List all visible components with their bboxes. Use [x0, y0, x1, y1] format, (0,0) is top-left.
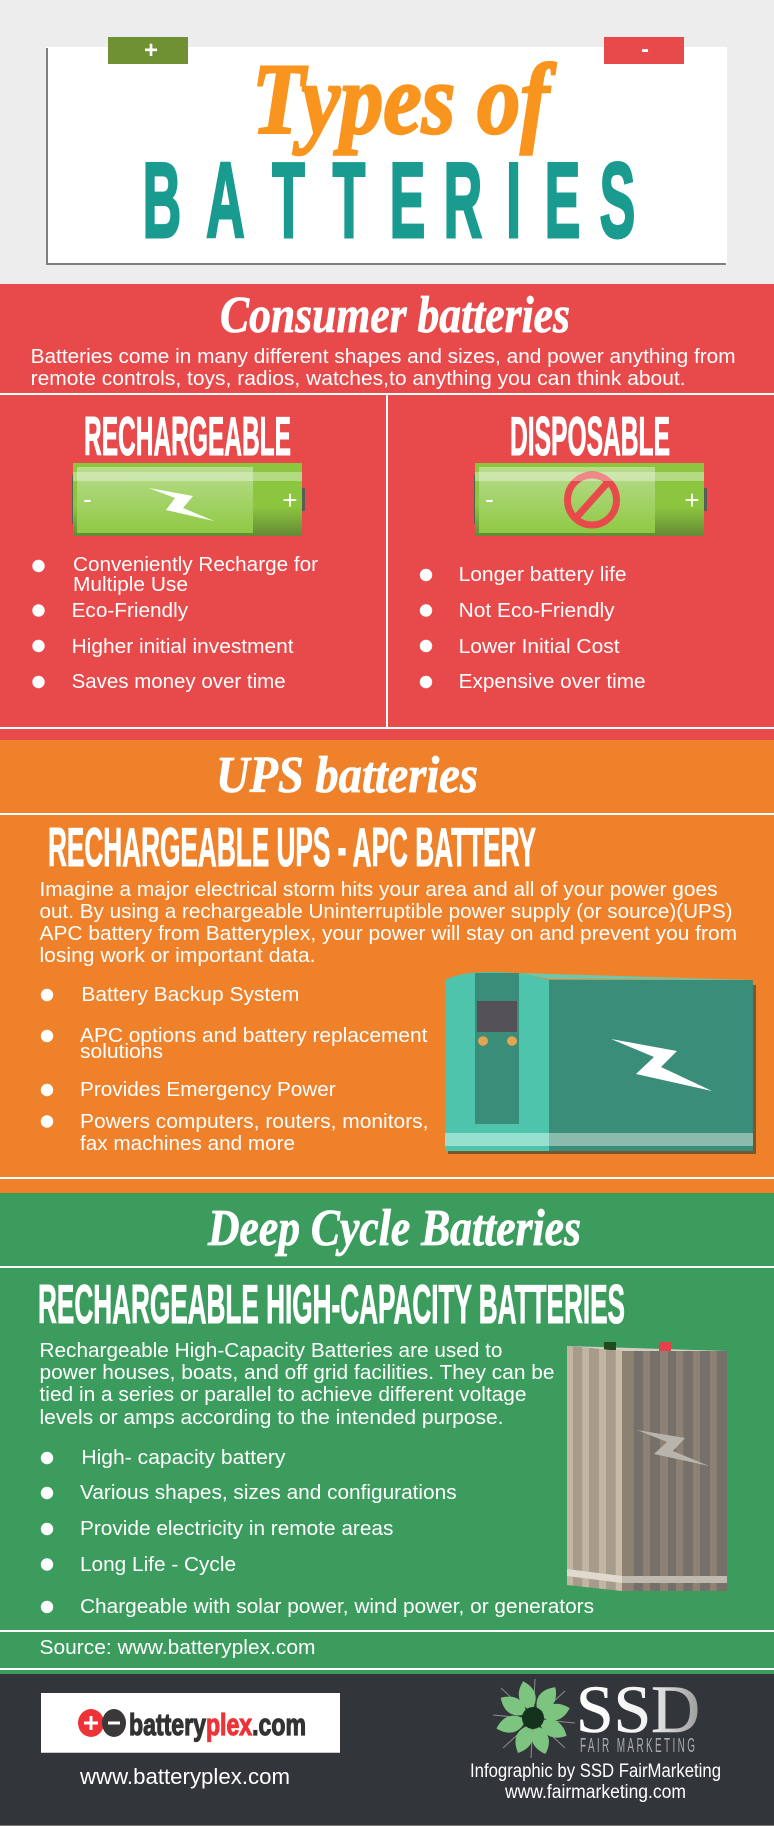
- intro text: [31, 346, 736, 390]
- logo: ssd wordmark: SSD: [576, 1671, 700, 1747]
- list: ups points: Provides Emergency Power: [80, 1079, 336, 1101]
- ups description: losing work or important data.: [40, 945, 316, 967]
- logo: ssd flower: [493, 1679, 575, 1758]
- minus tab: -: [641, 36, 649, 63]
- list: ups points: APC options and battery replacement: [80, 1025, 428, 1047]
- list: ups points: fax machines and more: [80, 1133, 295, 1155]
- source line: Source: www.batteryplex.com: [40, 1637, 316, 1659]
- list: deep cycle points: [41, 1447, 594, 1618]
- heading: ups batteries: UPS batteries: [216, 747, 478, 804]
- icon: rechargeable battery: +: [282, 485, 298, 515]
- ups description: out. By using a rechargeable Uninterruptible power supply (or source)(UPS): [40, 901, 732, 923]
- title card: [46, 36, 727, 265]
- list: deep cycle points: Provide electricity in remote areas: [80, 1518, 393, 1540]
- heading: consumer batteries: Consumer batteries: [220, 287, 570, 344]
- credit text: [470, 1761, 721, 1803]
- deep cycle description: [40, 1340, 554, 1429]
- ups description: [40, 879, 737, 967]
- credit text: Infographic by SSD FairMarketing: [470, 1761, 721, 1782]
- panel: deep cycle batteries: [0, 1193, 774, 1674]
- panel: footer: [0, 1671, 774, 1826]
- list: rechargeable points: [32, 554, 318, 693]
- list: deep cycle points: High- capacity battery: [81, 1447, 285, 1469]
- intro text: Batteries come in many different shapes and sizes, and power anything from: [31, 346, 736, 368]
- batteryplex url: www.batteryplex.com: [79, 1764, 290, 1789]
- credit text: www.fairmarketing.com: [504, 1782, 686, 1803]
- icon: rechargeable battery: [72, 463, 305, 536]
- title: types of: Types of: [252, 43, 557, 155]
- panel: consumer batteries: [0, 284, 774, 740]
- deep cycle description: Rechargeable High-Capacity Batteries are used to: [40, 1340, 503, 1362]
- list: ups points: solutions: [80, 1041, 163, 1063]
- deep cycle description: power houses, boats, and off grid facilities. They can be: [40, 1362, 554, 1384]
- panel: ups batteries: [0, 740, 774, 1193]
- list: rechargeable points: Conveniently Recharge for: [73, 554, 318, 576]
- list: rechargeable points: Eco-Friendly: [72, 600, 188, 622]
- icon: disposable battery: [474, 463, 707, 536]
- logo: batteryplex: batteryplex.com: [129, 1707, 306, 1742]
- deep cycle description: levels or amps according to the intended purpose.: [40, 1407, 504, 1429]
- icon: disposable battery: +: [684, 485, 700, 515]
- list: disposable points: [420, 564, 646, 693]
- list: deep cycle points: Chargeable with solar power, wind power, or generators: [80, 1596, 594, 1618]
- list: disposable points: Lower Initial Cost: [459, 636, 620, 658]
- panel: consumer batteries: RECHARGEABLE: [84, 405, 291, 467]
- list: rechargeable points: Multiple Use: [73, 574, 188, 596]
- list: disposable points: Expensive over time: [459, 671, 646, 693]
- list: ups points: [41, 984, 429, 1155]
- plus tab: [108, 37, 188, 64]
- list: disposable points: Not Eco-Friendly: [459, 600, 615, 622]
- icon: rechargeable battery: -: [83, 484, 92, 514]
- icon: ups battery: [445, 972, 756, 1154]
- ups description: APC battery from Batteryplex, your power will stay on and prevent you from: [40, 923, 737, 945]
- plus tab: +: [144, 37, 158, 64]
- minus tab: [604, 36, 684, 64]
- list: rechargeable points: Saves money over time: [72, 671, 286, 693]
- heading: deep cycle batteries: Deep Cycle Batteries: [207, 1200, 581, 1257]
- list: disposable points: Longer battery life: [459, 564, 627, 586]
- ups description: Imagine a major electrical storm hits your area and all of your power goes: [40, 879, 718, 901]
- list: rechargeable points: Higher initial investment: [72, 636, 294, 658]
- icon: deep cycle battery: [567, 1342, 727, 1591]
- list: ups points: Battery Backup System: [81, 984, 299, 1006]
- list: deep cycle points: Various shapes, sizes and configurations: [80, 1482, 457, 1504]
- list: ups points: Powers computers, routers, monitors,: [80, 1111, 428, 1133]
- icon: disposable battery: -: [485, 484, 494, 514]
- logo: batteryplex: [41, 1693, 340, 1753]
- title: batteries: BATTERIES: [143, 140, 635, 260]
- intro text: remote controls, toys, radios, watches,to anything you can think about.: [31, 368, 686, 390]
- deep cycle description: tied in a series or parallel to achieve different voltage: [40, 1384, 526, 1406]
- list: deep cycle points: Long Life - Cycle: [80, 1554, 236, 1576]
- logo: fair marketing: FAIR MARKETING: [580, 1736, 695, 1757]
